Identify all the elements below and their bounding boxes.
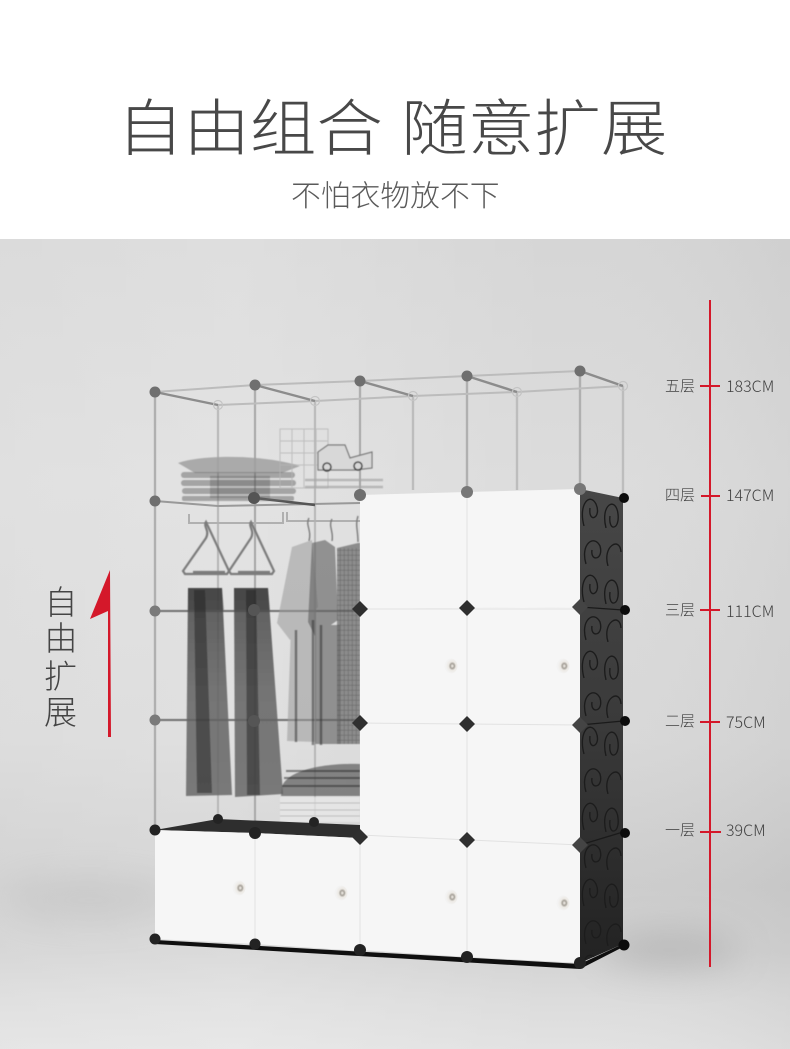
subtitle: 不怕衣物放不下: [291, 180, 500, 213]
bottom edge: [155, 940, 623, 969]
level: 3: 111CM: [726, 598, 774, 622]
side heading: free expansion: 扩: [44, 658, 77, 695]
level: 1: 39CM: [726, 817, 766, 841]
hanging rails: [189, 512, 362, 523]
level: 5: [665, 373, 774, 397]
side panel with swirl pattern: [580, 489, 623, 963]
panel: grey studio background: [0, 239, 790, 1049]
side heading: free expansion: 展: [44, 694, 77, 731]
door panels: [155, 489, 580, 963]
level: 1: [665, 817, 766, 841]
floor contact shadows: [5, 882, 740, 968]
door: upper right block: [360, 489, 580, 609]
open frame rods: [155, 371, 623, 830]
shelf contents: folded clothes: [178, 457, 300, 501]
level: 2: 75CM: [726, 709, 766, 733]
level: 3: [665, 598, 774, 622]
folded stack on lower shelf: [280, 764, 360, 822]
icon: hangers: [183, 516, 358, 574]
side heading: free expansion: 自: [44, 584, 78, 621]
level: 1: 一层: [665, 822, 695, 839]
height ruler: [665, 300, 774, 967]
wardrobe illustration: [150, 366, 630, 969]
title: 自由组合 随意扩展: [117, 94, 667, 163]
level: 5: 183CM: [726, 373, 774, 397]
dark shelf above bottom row: [155, 819, 360, 838]
door seams: [255, 492, 580, 957]
level: 2: 二层: [665, 713, 695, 730]
level: 4: 147CM: [726, 482, 774, 506]
hanging garments: sheer shirts: [277, 540, 360, 745]
arrow: expansion upward: [90, 570, 111, 737]
side heading: free expansion: 由: [44, 620, 78, 657]
connectors: black round joints: [150, 493, 630, 969]
level: 2: [665, 709, 766, 733]
hanging garments: two dark long pieces: [186, 588, 283, 797]
level: 5: 五层: [665, 378, 695, 395]
level: 3: 三层: [665, 602, 695, 619]
level: 4: [665, 482, 774, 506]
door knobs: [232, 658, 570, 910]
connectors: grey top joints: [150, 366, 586, 727]
connectors: dark diamond joints: [352, 599, 588, 853]
connectors: faint back joints: [214, 382, 628, 410]
shelf contents: toy truck and grid basket: [280, 429, 383, 488]
level: 4: 四层: [665, 487, 695, 504]
